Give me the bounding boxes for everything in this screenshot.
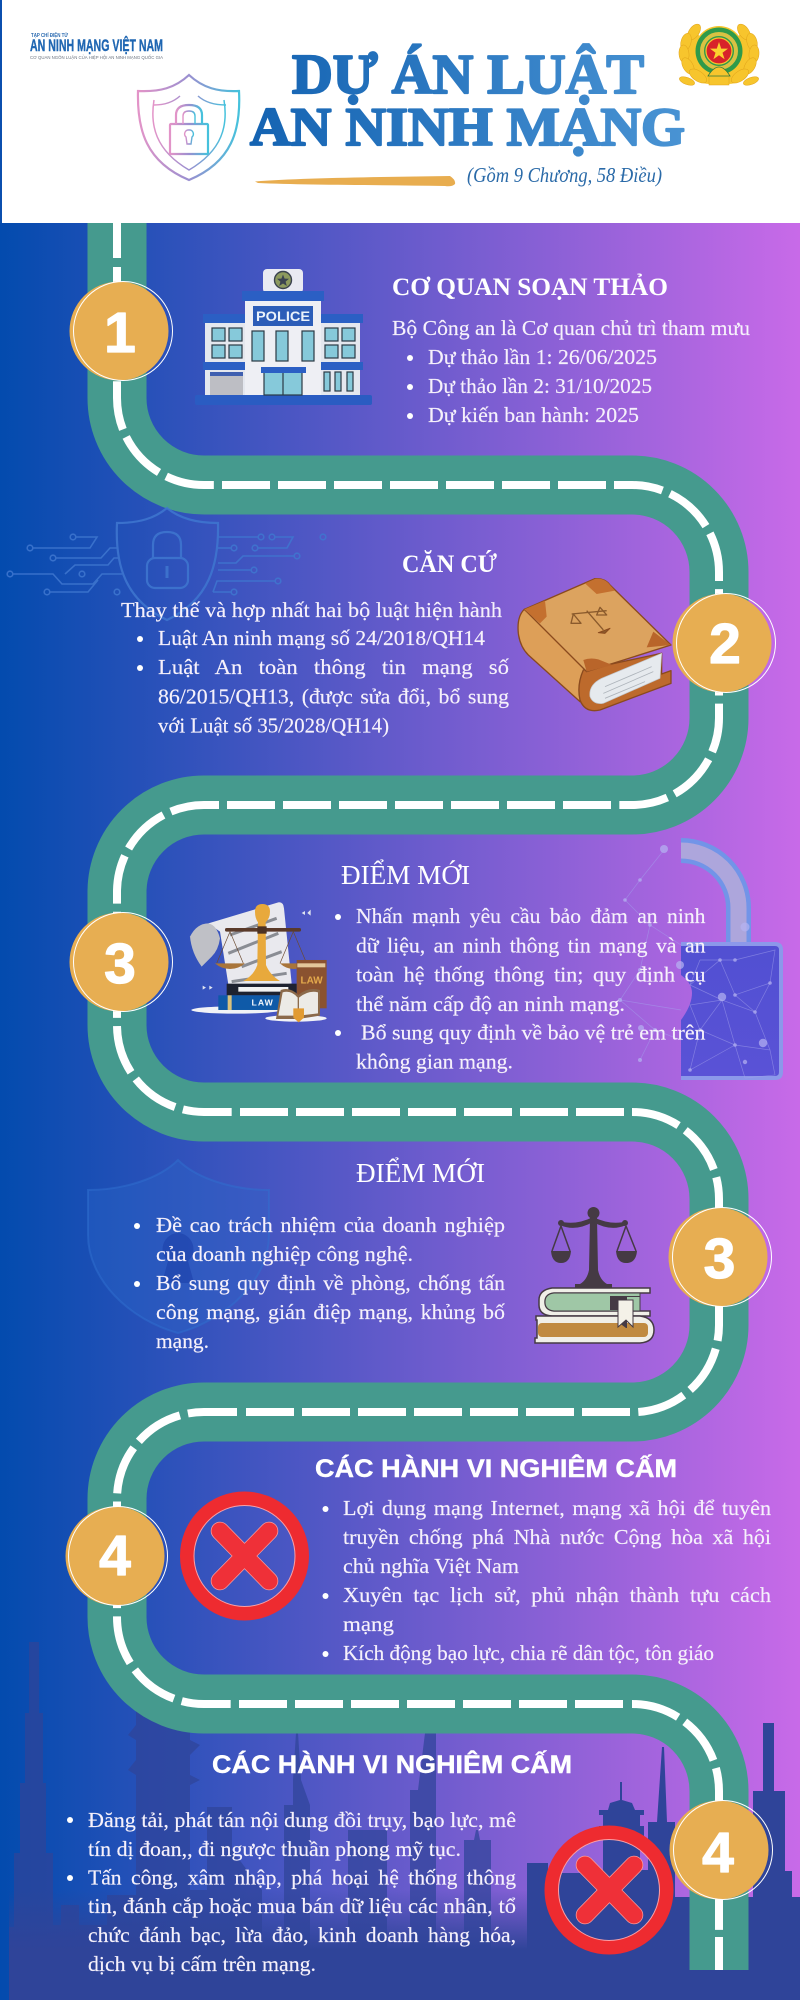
section 2 text <box>121 598 509 738</box>
section 1 text: Dự thảo lần 2: 31/10/2025 <box>428 374 652 398</box>
section 4 text: Kích động bạo lực, chia rẽ dân tộc, tôn giáo <box>343 1641 714 1665</box>
section 2 text: Thay thế và hợp nhất hai bộ luật hiện hành <box>121 598 502 622</box>
icon: red X 2 <box>552 1832 666 1948</box>
step badge 4b: 4 <box>702 1821 734 1885</box>
section 4 text: truyền chống phá Nhà nước Cộng hòa xã hội <box>343 1525 771 1549</box>
section 4b text: tín dị đoan,, đi ngược thuần phong mỹ tục. <box>88 1837 461 1861</box>
step badge 1 <box>70 282 172 380</box>
brush stroke underline <box>255 176 455 186</box>
logo: An Ninh Mạng Việt Nam: TẠP CHÍ ĐIỆN TỬ <box>31 31 69 39</box>
step badge 3b: 3 <box>704 1227 735 1291</box>
icon: police station: POLICE <box>256 308 310 324</box>
title: AN NINH MẠNG <box>250 97 685 157</box>
section 4b text: chức đánh bạc, lừa đảo, kinh doanh hàng hóa, <box>88 1923 516 1947</box>
background icon: digital padlock <box>618 845 781 1078</box>
section 2 heading: CĂN CỨ <box>402 550 497 578</box>
section 1 text: Dự thảo lần 1: 26/06/2025 <box>428 345 657 369</box>
section 4 text: Lợi dụng mạng Internet, mạng xã hội để tuyên <box>343 1496 771 1520</box>
section 2 text: Luật An ninh mạng số 24/2018/QH14 <box>158 626 485 650</box>
section 4b text: tin, đánh cắp hoặc mua bán dữ liệu các nhân, tổ <box>88 1894 516 1918</box>
icon: padlock shield outline <box>138 75 239 180</box>
road: winding green path <box>117 223 719 1970</box>
section 3b text: Đề cao trách nhiệm của doanh nghiệp <box>156 1213 505 1237</box>
title: DỰ ÁN LUẬT <box>292 43 644 106</box>
icon: scales on books <box>535 1207 654 1343</box>
section 3 text: thể năm cấp độ an ninh mạng. <box>356 992 625 1016</box>
section 4b heading: CÁC HÀNH VI NGHIÊM CẤM <box>212 1749 572 1779</box>
section 4 text <box>322 1496 771 1665</box>
section 3 text <box>335 904 706 1074</box>
section 3b text: Bổ sung quy định về phòng, chống tấn <box>156 1271 505 1295</box>
logo: An Ninh Mạng Việt Nam: CƠ QUAN NGÔN LUẬN CỦA HIỆP HỘI AN NINH MẠNG QUỐC GIA <box>30 53 164 60</box>
section 3b heading: ĐIỂM MỚI <box>356 1157 485 1188</box>
icon: red X <box>187 1498 302 1614</box>
step badge 4: 4 <box>99 1524 131 1588</box>
icon: scales of justice with law books: LAW <box>301 975 323 986</box>
logo: An Ninh Mạng Việt Nam: AN NINH MẠNG VIỆT NAM <box>30 36 163 55</box>
step badge 3 <box>70 912 172 1012</box>
step badge 2 <box>672 594 776 692</box>
step badge 2: 2 <box>709 612 741 676</box>
section 4b text: Tấn công, xâm nhập, phá hoại hệ thống thông <box>88 1866 516 1890</box>
title <box>250 43 685 157</box>
city skyline silhouette <box>9 1642 800 2000</box>
section 3b text: công mạng, gián điệp mạng, khủng bố <box>156 1300 505 1324</box>
section 4 text: chủ nghĩa Việt Nam <box>343 1554 519 1578</box>
step badge 1: 1 <box>104 301 136 365</box>
step badge 4 <box>66 1506 168 1606</box>
section 3 text: Nhấn mạnh yêu cầu bảo đảm an ninh <box>356 904 706 928</box>
section 4b text <box>67 1808 516 1976</box>
logo: An Ninh Mạng Việt Nam <box>30 31 164 60</box>
road centre dashes <box>117 223 719 1970</box>
section 3 text: không gian mạng. <box>356 1050 513 1074</box>
section 1 text: Bộ Công an là Cơ quan chủ trì tham mưu <box>392 316 750 340</box>
icon: law book <box>518 579 671 711</box>
section 3b text: mạng. <box>156 1329 209 1353</box>
icon: scales of justice with law books: LAW <box>252 998 274 1008</box>
section 2 text: 86/2015/QH13, (được sửa đổi, bổ sung <box>158 684 509 708</box>
step badge 4b <box>670 1800 772 1900</box>
section 4b text: dịch vụ bị cấm trên mạng. <box>88 1952 316 1976</box>
section 4 heading: CÁC HÀNH VI NGHIÊM CẤM <box>315 1453 677 1483</box>
background icon: digital shield <box>88 1160 269 1333</box>
icon: scales of justice with law books <box>190 902 327 1022</box>
icon: police station <box>195 269 372 405</box>
section 1 text <box>392 316 750 427</box>
section 1 heading: CƠ QUAN SOẠN THẢO <box>392 273 668 301</box>
section 3b text <box>134 1213 505 1353</box>
section 3b text: của doanh nghiệp công nghệ. <box>156 1242 413 1266</box>
section 3 text: dữ liệu, an ninh thông tin mạng và an <box>356 934 706 958</box>
section 3 heading: ĐIỂM MỚI <box>341 859 470 890</box>
section 2 text: Luật An toàn thông tin mạng số <box>158 655 509 679</box>
section 4 text: mạng <box>343 1612 394 1636</box>
section 3 text: Bổ sung quy định về bảo vệ trẻ em trên <box>361 1020 706 1044</box>
background icon: circuit shield <box>7 508 326 620</box>
header panel <box>0 0 800 223</box>
subtitle: (Gồm 9 Chương, 58 Điều) <box>467 163 662 187</box>
step badge 3b <box>668 1208 772 1306</box>
section 4 text: Xuyên tạc lịch sử, phủ nhận thành tựu cách <box>343 1583 771 1607</box>
section 3 text: toàn hệ thống thông tin; quy định cụ <box>356 962 706 986</box>
section 4b text: Đăng tải, phát tán nội dung đồi trụy, bạo lực, mê <box>88 1808 516 1832</box>
section 2 text: với Luật số 35/2028/QH14) <box>158 714 389 738</box>
icon: police emblem <box>678 22 760 87</box>
step badge 3: 3 <box>104 932 136 996</box>
section 1 text: Dự kiến ban hành: 2025 <box>428 403 639 427</box>
